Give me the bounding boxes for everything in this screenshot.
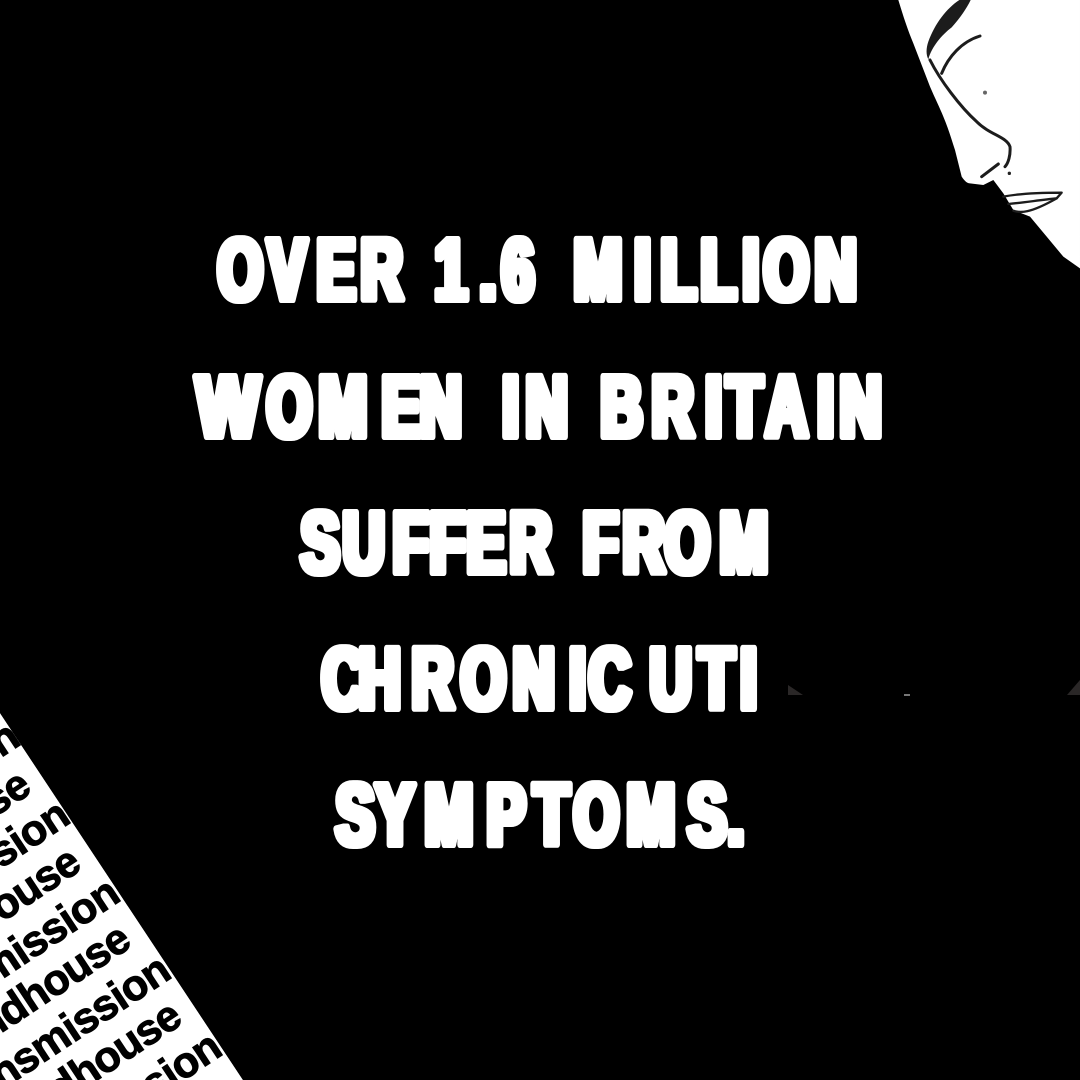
headline line 4: CHRONIC UTI: [322, 629, 757, 727]
faint artefact: left triangle: [788, 685, 803, 695]
headline line 2: W: [197, 359, 259, 456]
headline line 2: OMEN IN BRITAIN: [267, 357, 881, 455]
headline line 5: SYMPTOMS.: [336, 765, 744, 863]
diagonal white band with repeating wordmark: [0, 712, 243, 1080]
headline: [197, 220, 881, 863]
headline line 3: SUFFER FROM: [301, 493, 768, 591]
faint artefact: centre speck: [904, 694, 910, 696]
headline line 1: OVER 1.6 MILLION: [218, 220, 856, 318]
illustration: woman's face in profile: [898, 0, 1080, 268]
faint artefact: right triangle: [1067, 680, 1080, 695]
